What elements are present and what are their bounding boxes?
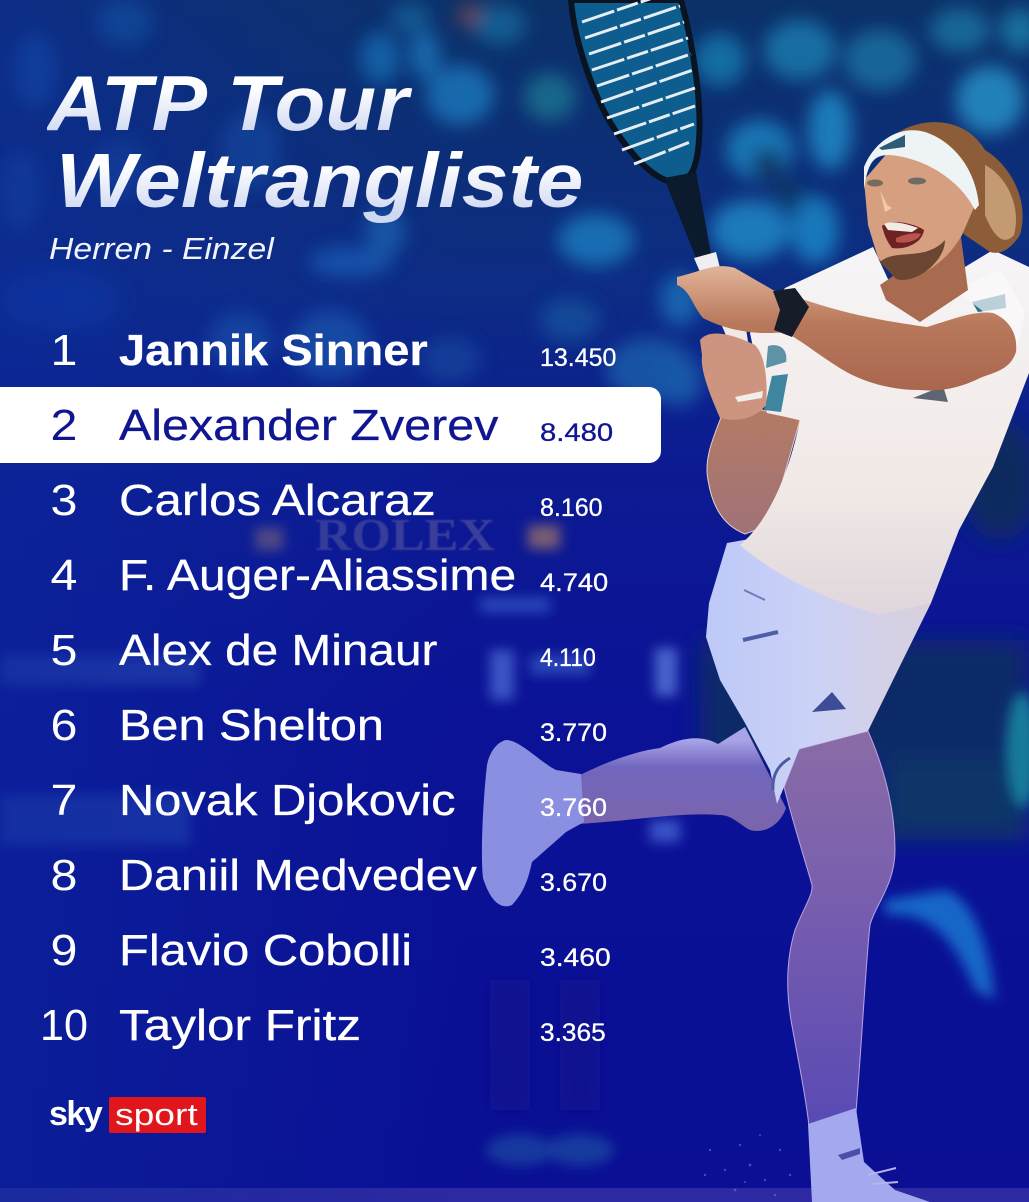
row 10 (40, 1001, 606, 1050)
player: shorts (706, 530, 931, 804)
row 1: 1 (51, 326, 77, 375)
player: head (864, 122, 1023, 322)
player: back shoe (482, 740, 584, 906)
player: standing leg (784, 731, 895, 1126)
row 5 (51, 626, 596, 675)
row 9: 3.460 (540, 944, 611, 972)
row 6 (51, 701, 607, 750)
clay dust (704, 1134, 791, 1196)
row 5: 4.110 (540, 644, 596, 672)
row 3: 8.160 (540, 494, 603, 522)
row 10: 10 (40, 1001, 88, 1050)
row 8 (51, 851, 607, 900)
logo: sky sport: sky (49, 1095, 101, 1133)
row 7 (51, 776, 607, 825)
row 6: 3.770 (540, 719, 607, 747)
title line 1: ATP Tour (47, 59, 408, 147)
title (47, 59, 583, 224)
row 9: 9 (51, 926, 77, 975)
player: hands and front arm (677, 266, 1016, 420)
row 3: Carlos Alcaraz (119, 476, 436, 525)
row 1: 13.450 (540, 344, 616, 372)
row 5: 5 (51, 626, 77, 675)
row 3: 3 (51, 476, 77, 525)
background photo with crowd and tennis player: ROLEX (315, 509, 495, 560)
row 6: Ben Shelton (119, 701, 384, 750)
highlight bar: rank 2 (0, 387, 661, 463)
row 2 (51, 401, 613, 450)
row 2: Alexander Zverev (119, 401, 498, 450)
row 1 (51, 326, 616, 375)
row 2: 2 (51, 401, 77, 450)
row 1: Jannik Sinner (119, 326, 428, 375)
row 8: Daniil Medvedev (119, 851, 477, 900)
player: back leg (578, 727, 786, 831)
row 8: 8 (51, 851, 77, 900)
player: sock and shoe (808, 1108, 930, 1202)
row 9: Flavio Cobolli (119, 926, 412, 975)
row 4: F. Auger-Aliassime (119, 551, 516, 600)
logo: sky sport (49, 1095, 206, 1133)
row 6: 6 (51, 701, 77, 750)
row 8: 3.670 (540, 869, 607, 897)
logo: sky sport: sport (115, 1097, 198, 1132)
racket (571, 0, 763, 404)
player: shirt (740, 247, 1029, 615)
title line 2: Weltrangliste (56, 138, 583, 224)
row 9 (51, 926, 611, 975)
row 5: Alex de Minaur (119, 626, 437, 675)
row 7: Novak Djokovic (119, 776, 456, 825)
ranking table (40, 326, 616, 1050)
row 7: 3.760 (540, 794, 607, 822)
row 10: Taylor Fritz (119, 1001, 361, 1050)
row 3 (51, 476, 603, 525)
row 4: 4.740 (540, 569, 608, 597)
row 10: 3.365 (540, 1019, 606, 1047)
row 2: 8.480 (540, 419, 613, 447)
player: rear arm (707, 410, 800, 534)
row 7: 7 (51, 776, 77, 825)
row 4: 4 (51, 551, 77, 600)
subtitle: Herren - Einzel (49, 231, 274, 266)
